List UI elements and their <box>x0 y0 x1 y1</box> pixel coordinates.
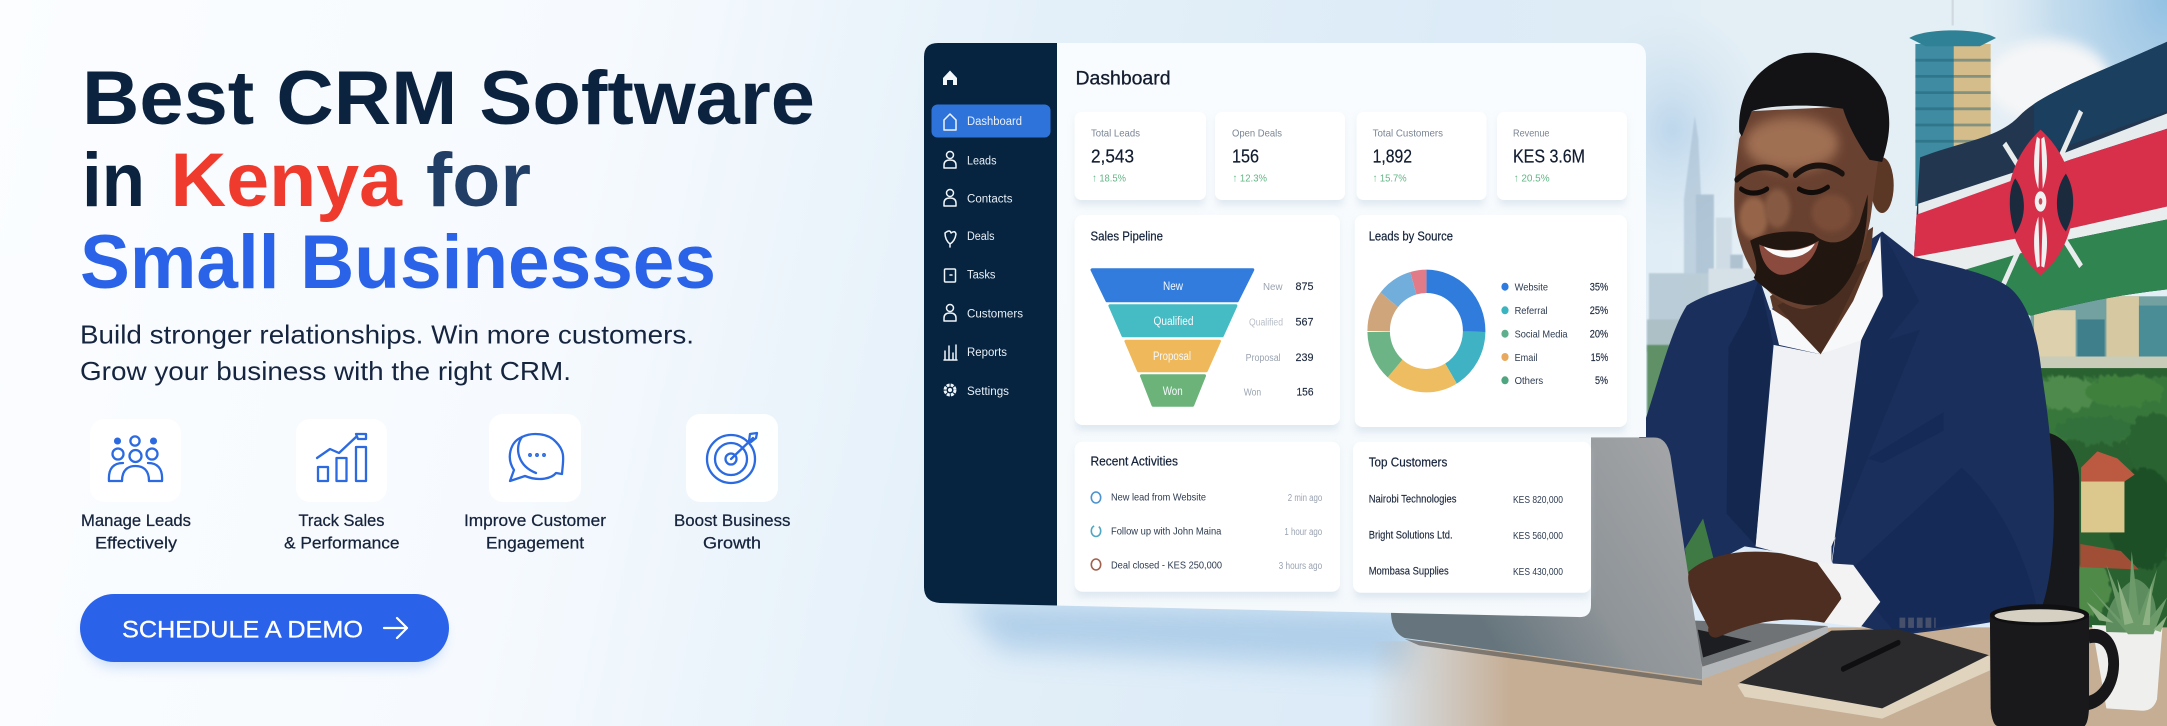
nav item: Tasks: Tasks <box>967 270 996 282</box>
title: for <box>426 138 531 223</box>
dashboard heading: Dashboard <box>1076 68 1170 89</box>
feature: Improve Customer Engagement: Engagement <box>486 534 584 553</box>
feature: Track Sales & Performance: & Performance <box>284 534 400 553</box>
funnel values: 875 <box>1296 281 1314 293</box>
funnel values: Qualified <box>1249 318 1283 329</box>
donut legend: Website <box>1515 282 1548 294</box>
feature: Boost Business Growth: Growth <box>703 534 761 553</box>
donut legend <box>1501 282 1608 387</box>
jacket pocket and sleeve shading <box>1846 412 2038 634</box>
funnel chart: New <box>1163 281 1184 293</box>
funnel values: Proposal <box>1246 353 1281 364</box>
icon: chat bubbles <box>510 434 563 481</box>
title: in <box>82 138 145 223</box>
right lapel <box>1832 232 1884 562</box>
eyebrows <box>1737 165 1842 180</box>
activity rows <box>1091 492 1323 572</box>
icon: bar chart with trend <box>317 434 366 481</box>
Kenyan flag <box>1911 28 2167 324</box>
flag spears <box>2002 111 2081 287</box>
panel: Top Customers: Top Customers <box>1369 456 1447 470</box>
stat card: Total Customers: ↑ 15.7% <box>1373 173 1407 185</box>
nav item: Settings <box>945 385 1009 398</box>
activity rows: 3 hours ago <box>1279 561 1323 572</box>
teeth <box>1763 244 1815 258</box>
beard <box>1750 194 1868 305</box>
buildings right <box>2030 296 2167 373</box>
shirt cuff <box>1817 563 1880 627</box>
hair <box>1739 53 1889 162</box>
feature: Improve Customer Engagement <box>464 414 606 553</box>
nav item: Dashboard active: Dashboard <box>967 116 1022 128</box>
head <box>1734 53 1894 309</box>
stat card: Revenue: Revenue <box>1513 128 1550 140</box>
stat card: Total Leads: 2,543 <box>1091 147 1134 167</box>
panel: Recent Activities <box>1074 442 1340 592</box>
coffee mug <box>1990 604 2114 726</box>
arrow <box>384 618 407 638</box>
button: Schedule a demo <box>80 594 449 668</box>
white shirt <box>1756 338 1862 567</box>
customer rows: Nairobi Technologies <box>1369 494 1457 506</box>
keyboard <box>1698 630 1752 657</box>
dashboard body <box>1056 43 1646 617</box>
funnel chart: Proposal <box>1153 351 1191 363</box>
funnel values: 239 <box>1296 352 1314 364</box>
feature: Manage Leads Effectively: Effectively <box>95 534 178 553</box>
funnel chart <box>1092 270 1253 405</box>
feature: Boost Business Growth: Boost Business <box>674 511 790 530</box>
funnel values: 567 <box>1296 317 1314 329</box>
man <box>1639 53 2054 635</box>
sidebar <box>924 43 1057 606</box>
activity rows: Deal closed - KES 250,000 <box>1111 560 1222 572</box>
panel: Sales Pipeline <box>1074 215 1340 425</box>
activity rows: New lead from Website <box>1111 492 1206 504</box>
button: Schedule a demo: SCHEDULE A DEMO <box>122 616 363 644</box>
subtitle: Grow your business with the right CRM. <box>80 356 571 386</box>
panel: Recent Activities: Recent Activities <box>1090 455 1178 469</box>
left lapel <box>1727 278 1773 545</box>
garden visible between arm and torso <box>1685 519 1716 574</box>
stat card: Open Deals: 156 <box>1232 147 1259 167</box>
potted plant <box>2086 551 2167 711</box>
typing hand <box>1688 552 1880 638</box>
donut legend: 25% <box>1590 305 1608 317</box>
smile <box>1759 241 1819 275</box>
stat card: Open Deals: ↑ 12.3% <box>1232 173 1267 185</box>
red-roof house <box>2080 451 2139 569</box>
Maasai shield <box>2008 130 2074 275</box>
card drop shadows <box>1076 118 1625 598</box>
hazy skyline left <box>1647 116 1756 352</box>
panel: Sales Pipeline: Sales Pipeline <box>1090 230 1163 244</box>
donut chart <box>1379 281 1474 381</box>
laptop front edge <box>1702 626 1828 679</box>
stat card: Total Customers <box>1356 112 1486 200</box>
nav item: Customers: Customers <box>967 308 1023 320</box>
Kenya International Convention Centre tower <box>1909 0 1996 206</box>
donut legend: Others <box>1515 375 1543 387</box>
sky <box>1646 0 2167 188</box>
stat card: Total Customers: 1,892 <box>1373 147 1412 167</box>
activity rows: Follow up with John Maina <box>1111 525 1222 537</box>
feature: Track Sales & Performance: Track Sales <box>298 511 384 530</box>
feature: Improve Customer Engagement: Improve Customer <box>464 511 606 530</box>
stat card: Revenue <box>1497 112 1627 200</box>
customer rows <box>1369 494 1563 578</box>
trees left of the man <box>1646 344 1670 417</box>
donut legend: 20% <box>1590 328 1608 340</box>
customer rows: KES 560,000 <box>1513 530 1563 542</box>
funnel values <box>1244 281 1314 399</box>
feature: Manage Leads Effectively: Manage Leads <box>81 511 191 530</box>
forest <box>2041 368 2167 628</box>
donut legend: 15% <box>1591 352 1608 364</box>
office chair <box>2039 433 2079 609</box>
customer rows: Mombasa Supplies <box>1369 566 1449 578</box>
neck <box>1770 227 1873 357</box>
title: Best CRM Software <box>82 56 815 141</box>
nav item: Contacts: Contacts <box>967 193 1013 205</box>
panel: dashboard window <box>924 43 1646 617</box>
nav item: Deals: Deals <box>967 231 995 243</box>
panel: Leads by Source <box>1355 215 1627 427</box>
title: Kenya <box>170 138 403 223</box>
funnel chart: Qualified <box>1154 316 1194 328</box>
panel: Leads by Source: Leads by Source <box>1369 230 1453 244</box>
feature: Manage Leads Effectively <box>81 419 191 553</box>
nav item: Reports <box>944 345 1007 360</box>
title: Small Businesses <box>80 220 716 305</box>
icon: brand home <box>943 70 957 85</box>
stat card: Revenue: KES 3.6M <box>1513 147 1585 167</box>
nav item: Dashboard active <box>932 104 1050 138</box>
stat card: Open Deals: Open Deals <box>1232 128 1282 140</box>
stat card: Total Leads <box>1074 112 1206 200</box>
panel: Top Customers <box>1353 442 1591 593</box>
stat card: Total Leads: ↑ 18.5% <box>1092 173 1126 185</box>
funnel chart: Won <box>1163 386 1183 398</box>
laptop lid <box>1391 438 1702 679</box>
nav item: Deals <box>945 231 995 247</box>
laptop <box>1391 438 1828 685</box>
title <box>80 56 815 305</box>
donut legend: 5% <box>1595 375 1608 387</box>
feature: Boost Business Growth <box>674 414 790 553</box>
funnel values: 156 <box>1296 387 1314 399</box>
subtitle: Build stronger relationships. Win more customers. <box>80 320 694 350</box>
nav item: Reports: Reports <box>967 347 1007 359</box>
nav item: Tasks <box>944 269 996 282</box>
icon: target with arrow <box>707 433 757 483</box>
soft dashboard shadow on backdrop <box>960 600 1420 668</box>
subtitle <box>80 320 694 386</box>
stat card: Open Deals <box>1215 112 1345 200</box>
customer rows: KES 430,000 <box>1513 566 1563 578</box>
icon: people <box>109 436 162 481</box>
donut legend: 35% <box>1590 282 1608 294</box>
nav item: Leads <box>944 152 997 168</box>
nav item: Customers <box>944 304 1023 321</box>
photo scene: man at laptop with Nairobi skyline and Kenyan flag <box>1300 0 2167 726</box>
funnel values: Won <box>1244 388 1261 399</box>
activity rows: 1 hour ago <box>1284 527 1323 538</box>
donut legend: Email <box>1515 352 1537 364</box>
nav item: Contacts <box>944 190 1013 206</box>
nav item: Settings: Settings <box>967 386 1009 398</box>
stat card: Total Leads: Total Leads <box>1091 128 1140 140</box>
funnel values: New <box>1263 282 1283 293</box>
activity rows: 2 min ago <box>1288 493 1323 504</box>
stat card: Revenue: ↑ 20.5% <box>1514 173 1550 185</box>
jacket sleeve buttons <box>1900 618 1936 628</box>
notebook and pen <box>1737 629 1990 719</box>
donut legend: Referral <box>1515 305 1548 317</box>
shirt collar <box>1770 236 1883 354</box>
feature: Track Sales & Performance <box>284 419 400 553</box>
eyes <box>1741 187 1828 193</box>
keyboard base <box>1690 620 1828 669</box>
customer rows: Bright Solutions Ltd. <box>1369 530 1453 542</box>
nav item: Leads: Leads <box>967 155 997 167</box>
stat card: Total Customers: Total Customers <box>1373 128 1443 140</box>
donut legend: Social Media <box>1515 328 1568 340</box>
navy suit jacket <box>1639 232 2054 635</box>
customer rows: KES 820,000 <box>1513 494 1563 506</box>
desk <box>1300 627 2167 726</box>
